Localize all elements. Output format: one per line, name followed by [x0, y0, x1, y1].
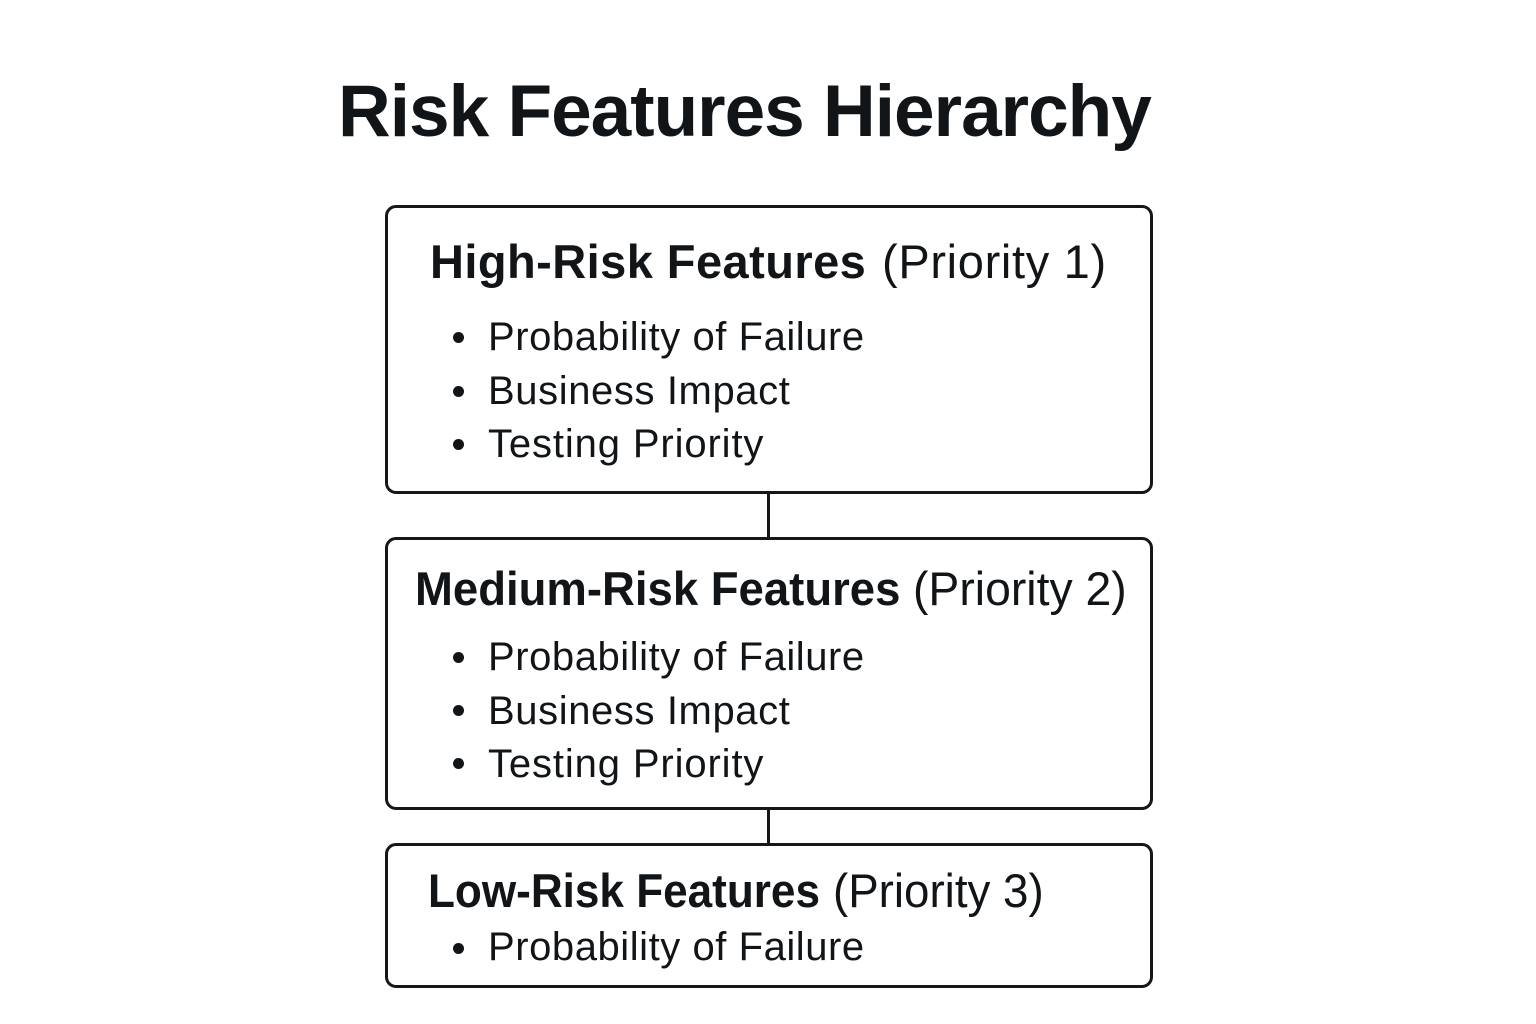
list: high-risk items: Business Impact	[488, 369, 790, 413]
connector: high to medium	[767, 493, 770, 538]
title: Risk Features Hierarchy	[338, 71, 1151, 152]
heading: medium-risk	[415, 562, 1127, 615]
heading: high-risk	[430, 235, 1107, 288]
heading: medium-risk: (Priority 2)	[913, 562, 1127, 615]
heading: medium-risk: Medium-Risk Features	[415, 562, 900, 615]
list: high-risk items: Testing Priority	[488, 422, 764, 466]
panel: high-risk features	[385, 205, 1153, 494]
list: medium-risk items: Probability of Failure	[488, 635, 865, 679]
list: medium-risk items: Testing Priority	[488, 742, 764, 786]
heading: low-risk: (Priority 3)	[833, 864, 1044, 917]
heading: low-risk	[428, 864, 1044, 917]
list: low-risk items: Probability of Failure	[488, 925, 865, 969]
panel: medium-risk features	[385, 537, 1153, 810]
connector: medium to low	[767, 809, 770, 844]
heading: high-risk: (Priority 1)	[882, 235, 1107, 288]
list: medium-risk items: Business Impact	[488, 689, 790, 733]
list: high-risk items	[453, 315, 865, 466]
heading: high-risk: High-Risk Features	[430, 235, 866, 288]
panel: low-risk features	[385, 843, 1153, 988]
list: high-risk items: Probability of Failure	[488, 315, 865, 359]
list: medium-risk items	[453, 635, 865, 786]
heading: low-risk: Low-Risk Features	[428, 864, 820, 917]
